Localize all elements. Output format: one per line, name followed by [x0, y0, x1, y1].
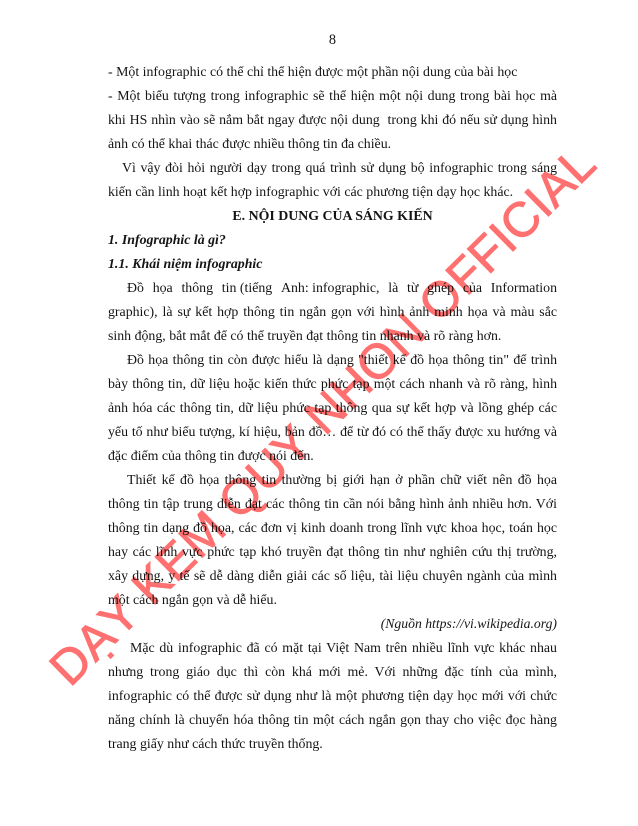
paragraph: information design: đặc điểm của thông tin được nói đến.	[108, 448, 314, 463]
text block: limitations of infographics: - Một infographic có thể chỉ thể hiện được một phần nội dung của bài học	[108, 64, 517, 79]
page number: 8	[329, 32, 336, 48]
text block: flexible use conclusion: Vì vậy đòi hỏi người dạy trong quá trình sử dụng bộ infographic trong sáng	[122, 160, 557, 175]
paragraph: information design: ảnh hóa các thông tin, dữ liệu phức tạp thông qua sự kết hợp và lồng ghép các	[108, 400, 557, 415]
paragraph: definition: sinh động, bắt mắt để có thể truyền đạt thông tin nhanh và rõ ràng hơn.	[108, 328, 501, 343]
paragraph: information design: Đồ họa thông tin còn được hiểu là dạng "thiết kế đồ họa thông tin" để trình	[127, 352, 557, 367]
paragraph: infographics in education: nhưng trong giáo dục thì còn khá mới mẻ. Với những đặc tính của mình,	[108, 664, 557, 679]
paragraph: infographics in education: infographic có thể được sử dụng như là một phương tiện dạy học mới với chức	[108, 688, 557, 703]
paragraph: infographics in education: trang giấy như cách thức truyền thống.	[108, 736, 323, 751]
section heading: E. NỘI DUNG CỦA SÁNG KIẾN	[232, 208, 433, 223]
paragraph: information design: yếu tố như biểu tượng, kí hiệu, bản đồ… để từ đó có thể thấy được xu hướng và	[108, 424, 557, 439]
paragraph: information design	[108, 352, 557, 463]
paragraph: infographics in education: năng chính là chuyển hóa thông tin một cách ngắn gọn thay cho việc đọc hàng	[108, 712, 557, 727]
paragraph: definition: tin (tiếng	[222, 280, 272, 295]
text block: flexible use conclusion: kiến cần linh hoạt kết hợp infographic với các phương tiện dạy học khác.	[108, 184, 513, 199]
text block: flexible use conclusion	[108, 160, 557, 199]
paragraph: design focus: Thiết kế đồ họa thông tin thường bị giới hạn ở phần chữ viết nên đồ họa	[127, 472, 557, 487]
source citation: (Nguồn https://vi.wikipedia.org)	[381, 616, 557, 631]
paragraph: definition: Anh: infographic,	[281, 280, 380, 295]
paragraph: definition: graphic), là sự kết hợp thông tin ngắn gọn với hình ảnh minh họa và màu sắc	[108, 304, 557, 319]
subheading 1.1: 1.1. Khái niệm infographic	[108, 256, 262, 271]
text block: limitations of infographics: ảnh có thể khai thác được nhiều thông tin đa chiều.	[108, 136, 391, 151]
paragraph: infographics in education	[108, 640, 557, 751]
text block: limitations of infographics: khi HS nhìn vào sẽ nắm bắt ngay được nội dung trong khi đó nếu sử dụng hình	[108, 112, 557, 127]
paragraph: information design: bày thông tin, dữ liệu hoặc kiến thức phức tạp một cách nhanh và rõ ràng, hình	[108, 376, 557, 391]
paragraph: definition: Đồ họa thông là từ ghép của Information	[127, 280, 557, 295]
text block: limitations of infographics	[108, 64, 557, 151]
watermark: DẠY KEM QUY NHON OFFICIAL	[40, 136, 606, 696]
paragraph: design focus: xây dựng, y tế sẽ dễ dàng diễn giải các số liệu, tài liệu chuyên ngành của mình	[108, 568, 557, 583]
paragraph: design focus: một cách ngắn gọn và dễ hiểu.	[108, 592, 277, 607]
paragraph: definition	[108, 280, 557, 343]
paragraph: design focus: hay các lĩnh vực phức tạp khó truyền đạt thông tin như nghiên cứu thị trường,	[108, 544, 557, 559]
paragraph: design focus: thông tin tập trung diễn đạt các thông tin cần nói bằng hình ảnh nhiều hơn. Với	[108, 496, 557, 511]
subheading 1: 1. Infographic là gì?	[108, 232, 226, 247]
paragraph: infographics in education: Mặc dù infographic đã có mặt tại Việt Nam trên nhiều lĩnh vực khác nhau	[130, 640, 557, 655]
text block: limitations of infographics: - Một biểu tượng trong infographic sẽ thể hiện một nội dung trong bài học mà	[108, 88, 557, 103]
paragraph: design focus	[108, 472, 557, 607]
paragraph: design focus: thông tin dạng đồ họa, các đơn vị kinh doanh trong lĩnh vực khoa học, toán học	[108, 520, 557, 535]
